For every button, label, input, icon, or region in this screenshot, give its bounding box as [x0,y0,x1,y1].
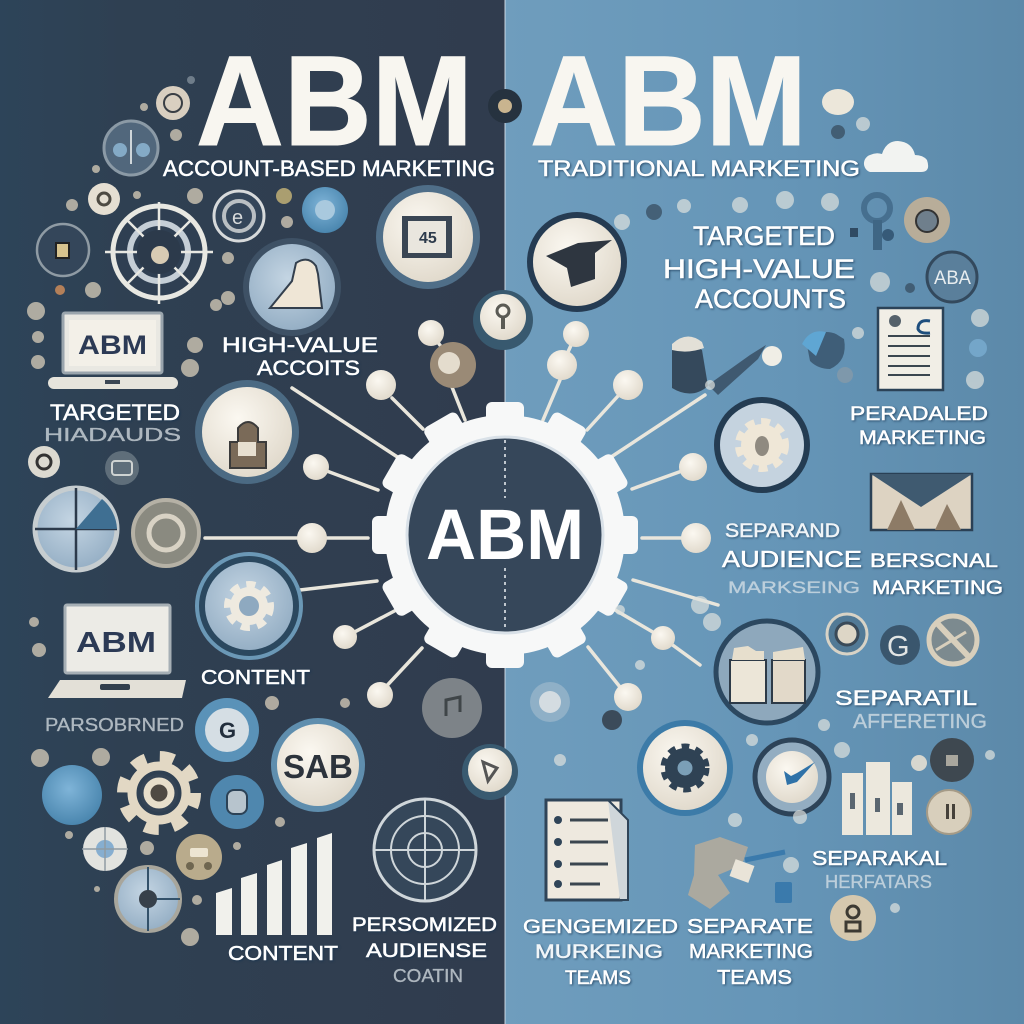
text: separate audience marketing: SEPARAND [725,521,840,542]
text: separate marketing teams [687,916,813,989]
text: high-value accounts: HIGH-VALUE [222,334,378,357]
icon: spiral badge [156,86,190,120]
icon: prohibited badge [929,616,977,664]
left panel icons [27,76,518,986]
text: personalized marketing: PERADALED [850,404,988,425]
text: personalized label: PARSOBRNED [45,715,184,735]
icon: tan disc [176,834,222,880]
icon: ABA ring badge [927,252,977,302]
text: generalized marketing teams: GENGEMIZED [523,917,678,938]
icon: ring badge [827,614,867,654]
left panel small clutter [27,76,350,946]
icon: small search circle [28,446,60,478]
icon: envelope [871,474,972,530]
icon: SAB circle [271,718,365,812]
text: targeted headline [44,400,181,445]
title: left ABM: ABM [196,30,473,173]
icon: lock person circle [195,380,299,484]
icon: blue seal [195,698,259,762]
connector lines and nodes [205,320,718,711]
icon: grey music circle [422,678,482,738]
text: separate features: SEPARAKAL [812,848,947,870]
icon: cream swirl badge [88,183,120,215]
icon: crumpled tools [688,837,792,909]
text: content bar label: CONTENT [228,943,338,965]
icon: top laptop [48,313,178,389]
icon: dark tool with check [672,336,782,395]
icon: e ring badge: e [232,207,243,229]
text: separate marketing teams: TEAMS [717,967,792,989]
icon: title separator dot [488,89,522,123]
icon: ringed compass disc [116,867,180,931]
icon: bottom laptop [48,605,186,698]
icon: blue chip disc [210,775,264,829]
icon: dark G badge: G [887,631,910,663]
icon: target crosshair [105,202,213,304]
icon: SAB circle: SAB [283,748,353,785]
text: targeted headline: TARGETED [50,400,180,425]
icon: cloud blob [822,89,854,115]
text: separate affereting [835,687,987,733]
icon: blue swirl badge [302,187,348,233]
icon: cream small badge [462,744,518,800]
chart: rising bars [216,833,332,935]
icon: tan coin [927,790,971,834]
text: targeted high-value accounts [663,221,855,314]
text: personalized marketing [850,404,988,449]
subtitle: traditional marketing: TRADITIONAL MARKETING [538,156,860,181]
icon: check dial circle [755,740,829,814]
center divider line [504,0,506,1024]
icon: blue seal: G [219,718,236,743]
text: separate marketing teams: MARKETING [689,941,813,963]
text: high-value accounts: ACCOITS [257,357,360,380]
text: generalized marketing teams [523,917,678,989]
text: personalized audience content: AUDIENSE [366,941,487,962]
text: separate affereting: SEPARATIL [835,687,977,710]
icon: blue segmented circle [35,488,117,570]
icon: gear circle [197,554,301,658]
icon: cream-gear circle [637,720,733,816]
icon: gear circle [714,397,810,493]
text: personal marketing: MARKETING [872,578,1003,599]
icon: grey ring badge [104,121,158,175]
icon: graduation cap circle [527,212,627,312]
icon: tan coin badge [904,197,950,243]
icon: grey coin circle [133,500,199,566]
subtitle: account-based marketing: ACCOUNT-BASED MARKETING [163,156,495,181]
icon: small dark rounded square [105,451,139,485]
text: generalized marketing teams: TEAMS [565,968,631,989]
text: targeted high-value accounts: ACCOUNTS [695,284,846,314]
icon: top center lock badge [473,290,533,350]
icon: cream server bars [842,762,912,835]
icon: dark tile disc [911,738,974,782]
text: separate audience marketing: MARKSEING [728,578,860,597]
icon: document checklist [546,800,628,900]
icon: blue disc [42,765,102,825]
text: generalized marketing teams: MURKEING [535,942,663,963]
icon: top laptop: ABM [78,330,147,360]
text: personal marketing: BERSCNAL [870,551,998,572]
icon: key silhouette [850,195,894,250]
right panel icons [523,89,1003,989]
central gear [372,402,638,668]
icon: small disc cluster [530,682,622,730]
icon: ABA ring badge: ABA [934,268,971,289]
background: right blue panel [505,0,1024,1024]
text: separate features [812,848,947,892]
icon: dark ring compass [37,224,89,276]
icon: dark G badge [880,625,920,665]
text: high-value accounts [222,334,378,380]
gear label: ABM [426,496,584,575]
icon: bottom laptop: ABM [76,627,156,659]
background: left dark panel [0,0,505,1024]
text: separate affereting: AFFERETING [853,711,987,733]
text: separate audience marketing [722,521,862,597]
text: targeted high-value accounts: TARGETED [693,221,835,251]
icon: boxes circle [716,621,818,723]
icon: book circle [376,185,480,289]
icon: book circle: 45 [419,230,437,247]
text: targeted headline: HIADAUDS [44,425,181,445]
text: personal marketing [870,551,1003,599]
right panel small clutter [554,117,995,913]
text: personalized audience content: COATIN [393,966,463,986]
icon: document [878,308,943,390]
icon: dark target [374,799,476,901]
text: separate audience marketing: AUDIENCE [722,546,862,572]
text: personalized audience content [352,915,497,986]
icon: white crosshair disc [82,827,128,871]
text: personalized audience content: PERSOMIZED [352,915,497,936]
icon: bottom tan coin [830,895,876,941]
icon: cloud [864,141,928,172]
icon: blue swirl hook [802,331,853,383]
icon: e ring badge [214,191,264,241]
icon: cream gear [126,760,192,826]
text: separate features: HERFATARS [825,872,932,892]
text: separate marketing teams: SEPARATE [687,916,813,938]
title: right ABM: ABM [530,30,807,173]
text: content label: CONTENT [201,667,310,689]
text: personalized marketing: MARKETING [859,428,986,449]
icon: high-value circle [243,238,341,336]
text: targeted high-value accounts: HIGH-VALUE [663,254,855,284]
